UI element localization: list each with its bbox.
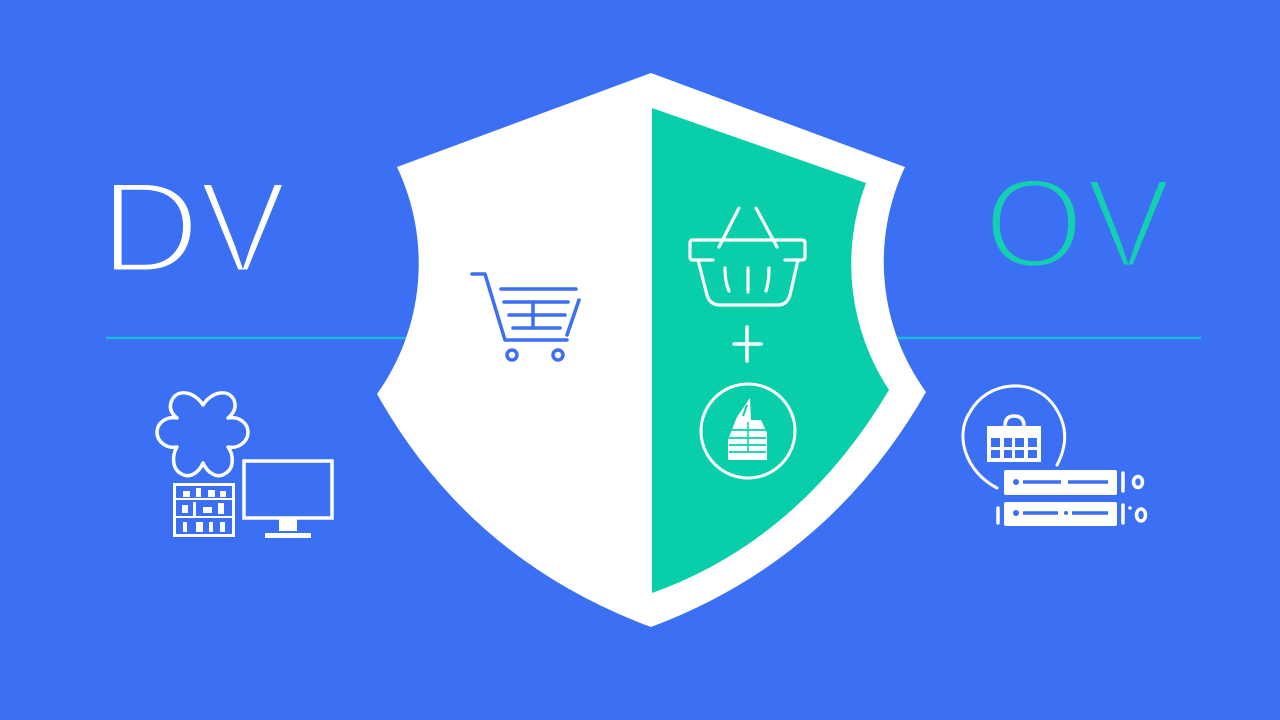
icon: building in circle xyxy=(701,384,795,478)
icon: cloud, grid and monitor xyxy=(157,393,332,538)
cloud xyxy=(157,393,248,476)
heading: DV: V xyxy=(200,154,286,300)
server rack top xyxy=(1004,470,1142,495)
monitor xyxy=(244,461,332,538)
heading: OV: O xyxy=(984,152,1084,294)
divider line: left xyxy=(106,337,412,339)
shield green half xyxy=(652,108,889,593)
shield xyxy=(377,73,926,627)
heading: DV: D xyxy=(100,154,200,300)
icon: store in circle with server racks xyxy=(963,386,1146,526)
server rack bottom xyxy=(998,502,1146,526)
server grid xyxy=(174,484,234,536)
shield outer white body xyxy=(377,73,926,627)
circle arc xyxy=(963,386,1065,488)
icon: shopping cart xyxy=(472,274,579,360)
store xyxy=(987,416,1041,462)
icon: plus sign xyxy=(734,327,761,361)
heading: OV: V xyxy=(1086,152,1171,294)
heading: OV xyxy=(984,152,1171,294)
divider line: right xyxy=(890,337,1201,339)
heading: DV xyxy=(100,154,286,300)
icon: shopping basket xyxy=(690,208,805,305)
